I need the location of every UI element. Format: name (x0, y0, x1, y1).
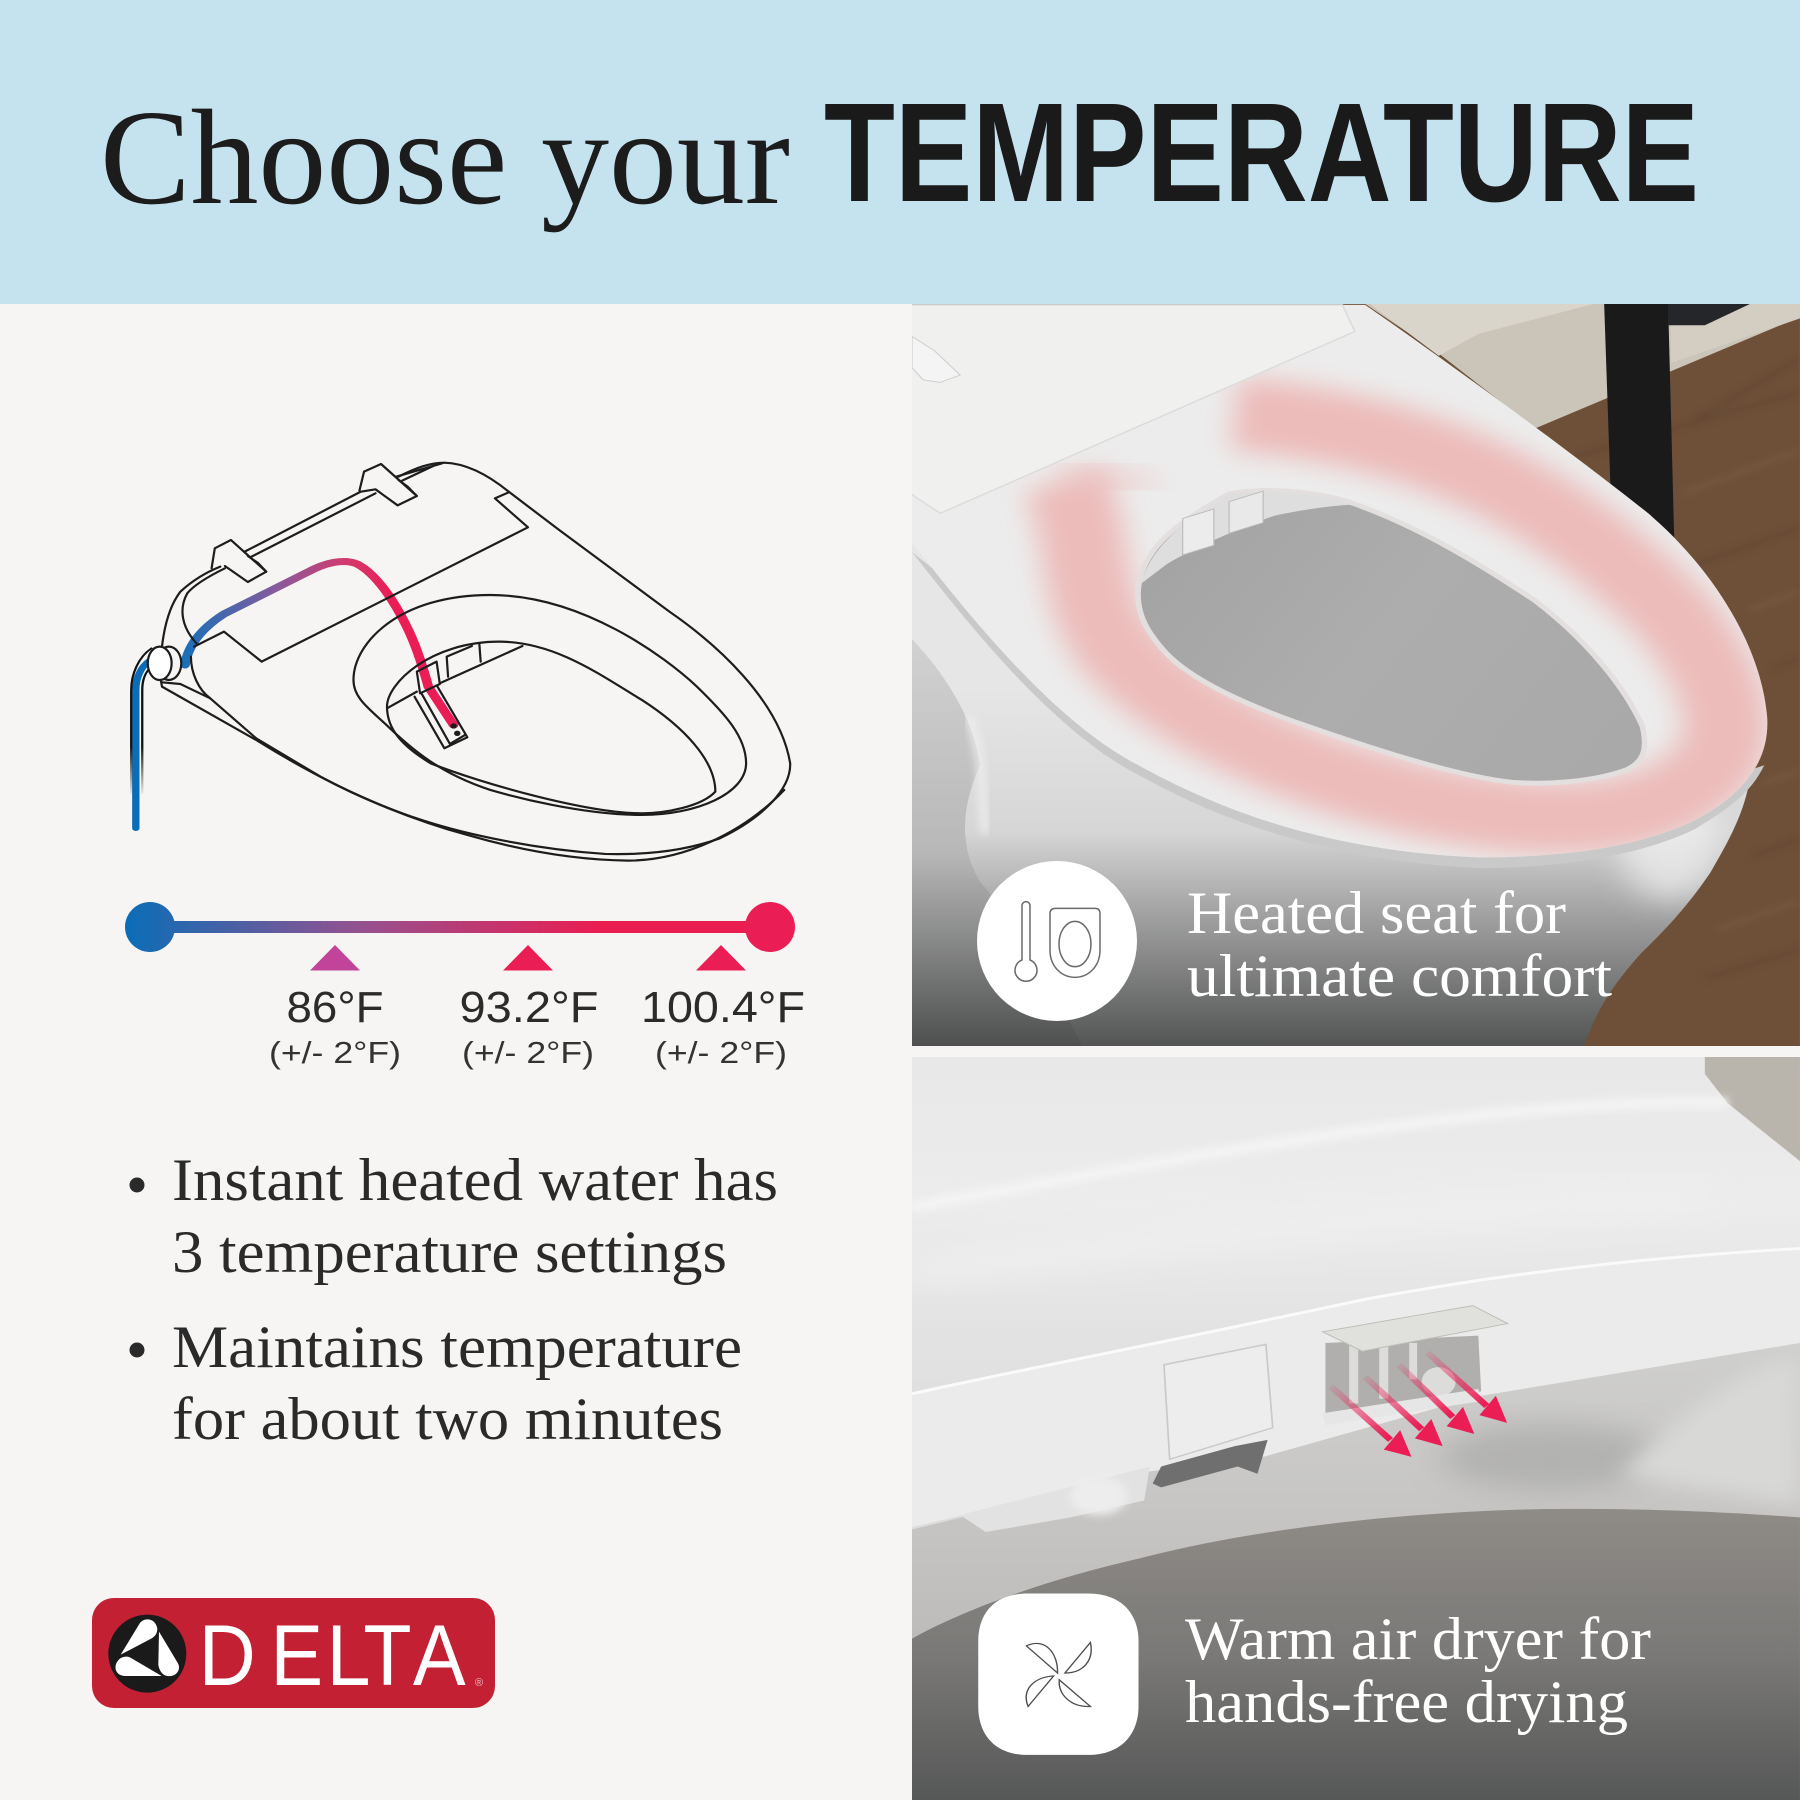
wall and baseboard (1359, 300, 1800, 428)
gradient bar (150, 921, 770, 933)
seat outline (161, 463, 790, 861)
bullet dot 1 (130, 1178, 144, 1192)
Delta logo (92, 1598, 495, 1708)
seat photo scene (909, 300, 1800, 1056)
seat bumper (960, 1467, 1150, 1532)
bullet 2 text line 1: Maintains temperature (172, 1314, 742, 1380)
seat front band (912, 1326, 1800, 1527)
bowl (912, 518, 1750, 1046)
temperature scale (125, 902, 805, 1070)
marker 93.2F (503, 945, 553, 970)
label 100.4F: 100.4°F (641, 983, 805, 1032)
label 86F: 86°F (286, 983, 384, 1032)
dryer photo scene (912, 1055, 1800, 1800)
side button (1164, 1344, 1273, 1459)
seat opening inner wall (1138, 490, 1645, 783)
icon tile: fan (978, 1594, 1139, 1755)
hinge cover (912, 336, 960, 382)
tolerance 3: (+/- 2°F) (655, 1035, 787, 1070)
heated water pipe (185, 561, 454, 725)
dark hinge (1153, 1440, 1268, 1487)
bullet 1 text line 2: 3 temperature settings (172, 1219, 727, 1285)
wall corner (1705, 1055, 1800, 1161)
panel: heated seat photo (909, 300, 1800, 1056)
bowl interior (912, 1509, 1800, 1800)
tolerance 1: (+/- 2°F) (269, 1035, 401, 1070)
vent flap (1323, 1306, 1508, 1351)
seat control lid outline (194, 492, 528, 662)
seat opening (387, 642, 715, 813)
opening upper wall (1141, 492, 1354, 584)
seat lower rim (912, 552, 1764, 868)
logo emblem (108, 1615, 186, 1693)
blue inlet hose (136, 661, 150, 828)
lid highlight band (1132, 1093, 1732, 1168)
rim below seat (912, 1343, 1800, 1638)
bullet list (130, 1147, 778, 1452)
hot end (745, 902, 795, 952)
left panel background (0, 304, 912, 1800)
label 93.2F: 93.2°F (460, 983, 598, 1032)
seat top (912, 305, 1767, 857)
header banner (0, 0, 1800, 304)
upper surface (912, 1055, 1800, 1544)
airflow arrows (1331, 1353, 1507, 1457)
control lid (909, 305, 1355, 513)
heated ring glow (1065, 414, 1725, 818)
panel: warm air dryer photo (912, 1055, 1800, 1800)
caption: heated seat: ultimate comfort (1187, 943, 1612, 1009)
title: serif part: Choose your (100, 83, 790, 233)
hinge knob (148, 647, 181, 680)
marker 86F (310, 945, 360, 970)
hose outline (131, 648, 151, 793)
nozzle dots (450, 723, 457, 729)
seat ring (353, 595, 746, 815)
registered mark: ® (475, 1677, 483, 1689)
diagram: toilet seat line drawing with water pipe (131, 463, 790, 861)
icon: thermometer and seat (977, 861, 1137, 1021)
caption: heated seat (1188, 890, 1612, 996)
caption: air dryer: hands-free drying (1185, 1669, 1628, 1735)
mount pads and rails (212, 540, 266, 582)
bullet dot 2 (130, 1342, 144, 1358)
bullet 1 text line 1: Instant heated water has (172, 1147, 778, 1213)
tolerance 2: (+/- 2°F) (462, 1035, 594, 1070)
wand (417, 662, 440, 693)
wood floor (912, 300, 1800, 1056)
caption: air dryer (1185, 1606, 1651, 1735)
black stand (1604, 300, 1674, 540)
left pedestal shadow (912, 640, 991, 982)
caption: air dryer: Warm air dryer for (1185, 1606, 1651, 1672)
bullet 2 text line 2: for about two minutes (172, 1386, 723, 1452)
cold end (125, 902, 175, 952)
caption: heated seat: Heated seat for (1187, 880, 1566, 946)
vent opening (1325, 1336, 1481, 1416)
wordmark: DELTA (199, 1607, 466, 1704)
marker 100.4F (696, 945, 746, 970)
